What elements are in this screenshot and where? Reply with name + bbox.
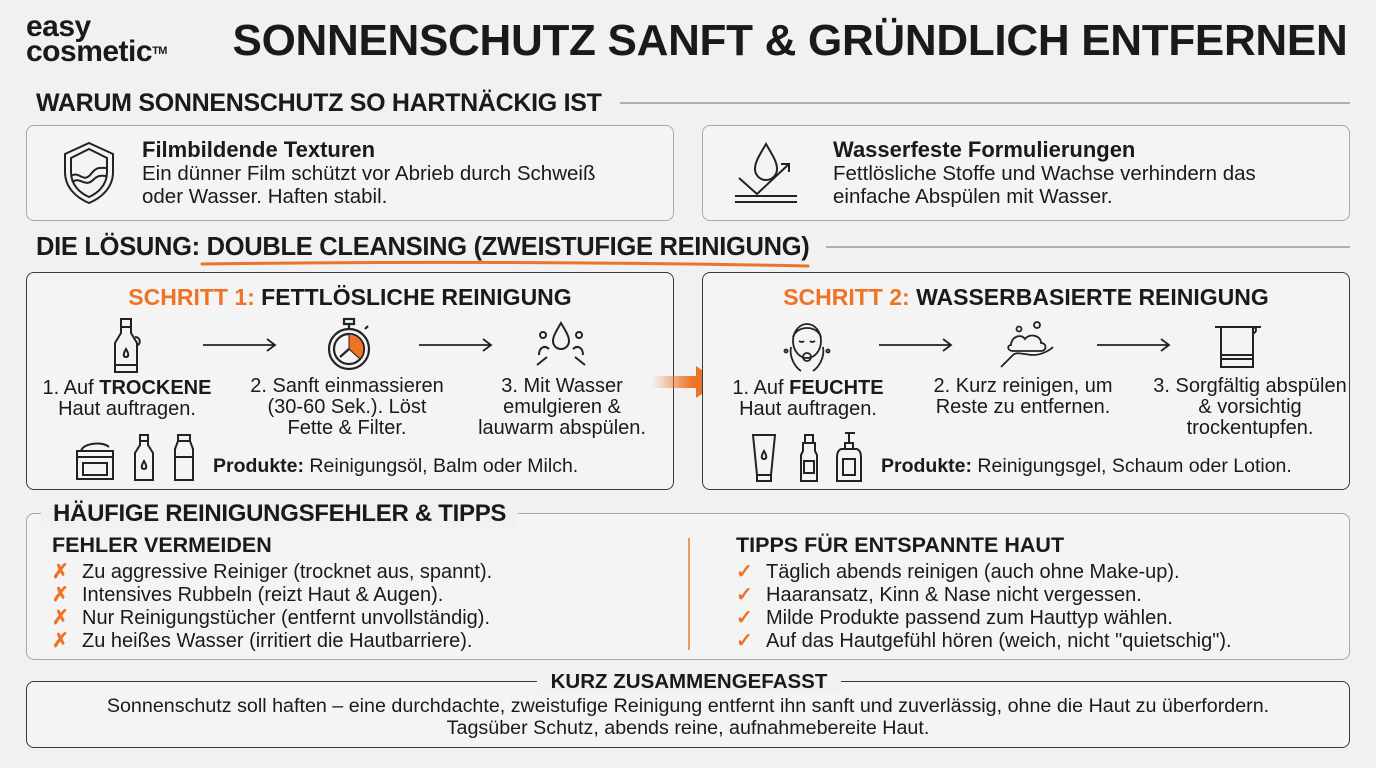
text: step 2.1 — [732, 377, 884, 420]
summary text: Sonnenschutz soll haften – eine durchdachte, zweistufige Reinigung entfernt ihn sanft und zuverlässig, ohne die Haut zu überfordern. — [107, 695, 1269, 717]
arrow — [419, 338, 492, 352]
arrow: orange between steps — [654, 366, 702, 398]
title: SONNENSCHUTZ SANFT & GRÜNDLICH ENTFERNEN — [233, 16, 1347, 65]
icons: products — [752, 432, 862, 482]
list: tipps — [736, 533, 1232, 652]
list: fehler vermeiden — [52, 533, 492, 652]
list: tipps: ✓ — [736, 584, 753, 606]
text: step 2.3: 3. Sorgfältig abspülen — [1153, 375, 1347, 397]
logo: easy — [26, 10, 91, 43]
list: tipps: Täglich abends reinigen (auch ohne Make-up). — [766, 561, 1180, 583]
panel: schritt 1 — [26, 272, 674, 490]
icons: products — [76, 434, 194, 481]
icon: shield — [64, 142, 114, 204]
text: step 2.3 — [1153, 375, 1347, 439]
arrow — [203, 338, 276, 352]
icon: foam hand — [1000, 321, 1054, 368]
heading: SCHRITT 1: FETTLÖSLICHE REINIGUNG — [128, 284, 572, 310]
icon: oil bottle — [114, 318, 141, 373]
list: tipps: ✓ — [736, 630, 753, 652]
heading: SCHRITT 2: WASSERBASIERTE REINIGUNG — [783, 284, 1269, 310]
text: step 1.3 — [478, 375, 646, 439]
text: step 1.1: 1. Auf TROCKENE — [43, 377, 211, 399]
logo — [26, 10, 167, 68]
list: fehler vermeiden: ✗ — [52, 584, 69, 606]
summary text — [107, 695, 1269, 739]
summary text: Tagsüber Schutz, abends reine, aufnahmebereite Haut. — [447, 717, 929, 739]
icon: water splash — [536, 321, 586, 366]
list: tipps: Haaransatz, Kinn & Nase nicht vergessen. — [766, 584, 1142, 606]
list: fehler vermeiden: ✗ — [52, 607, 69, 629]
heading: HÄUFIGE REINIGUNGSFEHLER & TIPPS — [53, 500, 506, 527]
list: fehler vermeiden: Intensives Rubbeln (reizt Haut & Augen). — [82, 584, 443, 606]
icon: stopwatch — [328, 318, 370, 370]
panel: schritt 2 — [702, 272, 1350, 490]
text block: Filmbildende Texturen — [142, 137, 375, 162]
icon: face washing — [784, 323, 830, 372]
text block — [833, 137, 1256, 208]
icon: water drop repel — [735, 142, 797, 203]
text: step 1.3: lauwarm abspülen. — [478, 417, 646, 439]
panel: fehler & tipps — [26, 513, 1350, 660]
text block: einfache Abspülen mit Wasser. — [833, 185, 1113, 208]
panel: filmbildende texturen — [26, 125, 674, 221]
list: tipps: TIPPS FÜR ENTSPANNTE HAUT — [736, 533, 1064, 557]
list: fehler vermeiden: FEHLER VERMEIDEN — [52, 533, 272, 557]
text: step 2.2: Reste zu entfernen. — [936, 396, 1110, 418]
panel: kurz zusammengefasst — [26, 681, 1350, 748]
text: step 2.3: & vorsichtig — [1198, 396, 1302, 418]
heading: die lösung: DIE LÖSUNG: DOUBLE CLEANSING (ZWEISTUFIGE REINIGUNG) — [36, 233, 809, 261]
text: produkte: Produkte: Reinigungsöl, Balm oder Milch. — [213, 455, 578, 477]
text block: Ein dünner Film schützt vor Abrieb durch Schweiß — [142, 162, 595, 185]
panel: wasserfeste formulierungen — [702, 125, 1350, 221]
text block: Fettlösliche Stoffe und Wachse verhindern das — [833, 162, 1256, 185]
list: fehler vermeiden: Nur Reinigungstücher (entfernt unvollständig). — [82, 607, 490, 629]
text: step 1.1: Haut auftragen. — [58, 398, 196, 420]
text: step 1.3: 3. Mit Wasser — [501, 375, 623, 397]
text: step 1.3: emulgieren & — [503, 396, 621, 418]
arrow — [879, 338, 952, 352]
icon: towel — [1215, 326, 1261, 368]
text block: oder Wasser. Haften stabil. — [142, 185, 387, 208]
text: step 1.2: (30-60 Sek.). Löst — [268, 396, 426, 418]
text: step 2.1: Haut auftragen. — [739, 398, 877, 420]
logo: cosmeticTM — [26, 35, 167, 68]
text: produkte: Produkte: Reinigungsgel, Schaum oder Lotion. — [881, 455, 1292, 477]
list: fehler vermeiden: Zu heißes Wasser (irritiert die Hautbarriere). — [82, 630, 472, 652]
list: tipps: Auf das Hautgefühl hören (weich, nicht "quietschig"). — [766, 630, 1232, 652]
text: step 2.3: trockentupfen. — [1187, 417, 1313, 439]
text block — [142, 137, 595, 208]
arrow — [1097, 338, 1170, 352]
list: tipps: Milde Produkte passend zum Hauttyp wählen. — [766, 607, 1173, 629]
list: tipps: ✓ — [736, 607, 753, 629]
text: step 1.2: 2. Sanft einmassieren — [250, 375, 444, 397]
text: step 2.2 — [934, 375, 1112, 418]
text: step 2.1: 1. Auf FEUCHTE — [732, 377, 884, 399]
text: step 1.2: Fette & Filter. — [288, 417, 406, 439]
list: fehler vermeiden: Zu aggressive Reiniger (trocknet aus, spannt). — [82, 561, 492, 583]
list: fehler vermeiden: ✗ — [52, 561, 69, 583]
text: step 2.2: 2. Kurz reinigen, um — [934, 375, 1112, 397]
heading: KURZ ZUSAMMENGEFASST — [551, 670, 827, 693]
text block: Wasserfeste Formulierungen — [833, 137, 1135, 162]
list: fehler vermeiden: ✗ — [52, 630, 69, 652]
text: step 1.1 — [43, 377, 211, 420]
text: step 1.2 — [250, 375, 444, 439]
list: tipps: ✓ — [736, 561, 753, 583]
heading: warum: WARUM SONNENSCHUTZ SO HARTNÄCKIG IST — [36, 89, 602, 117]
